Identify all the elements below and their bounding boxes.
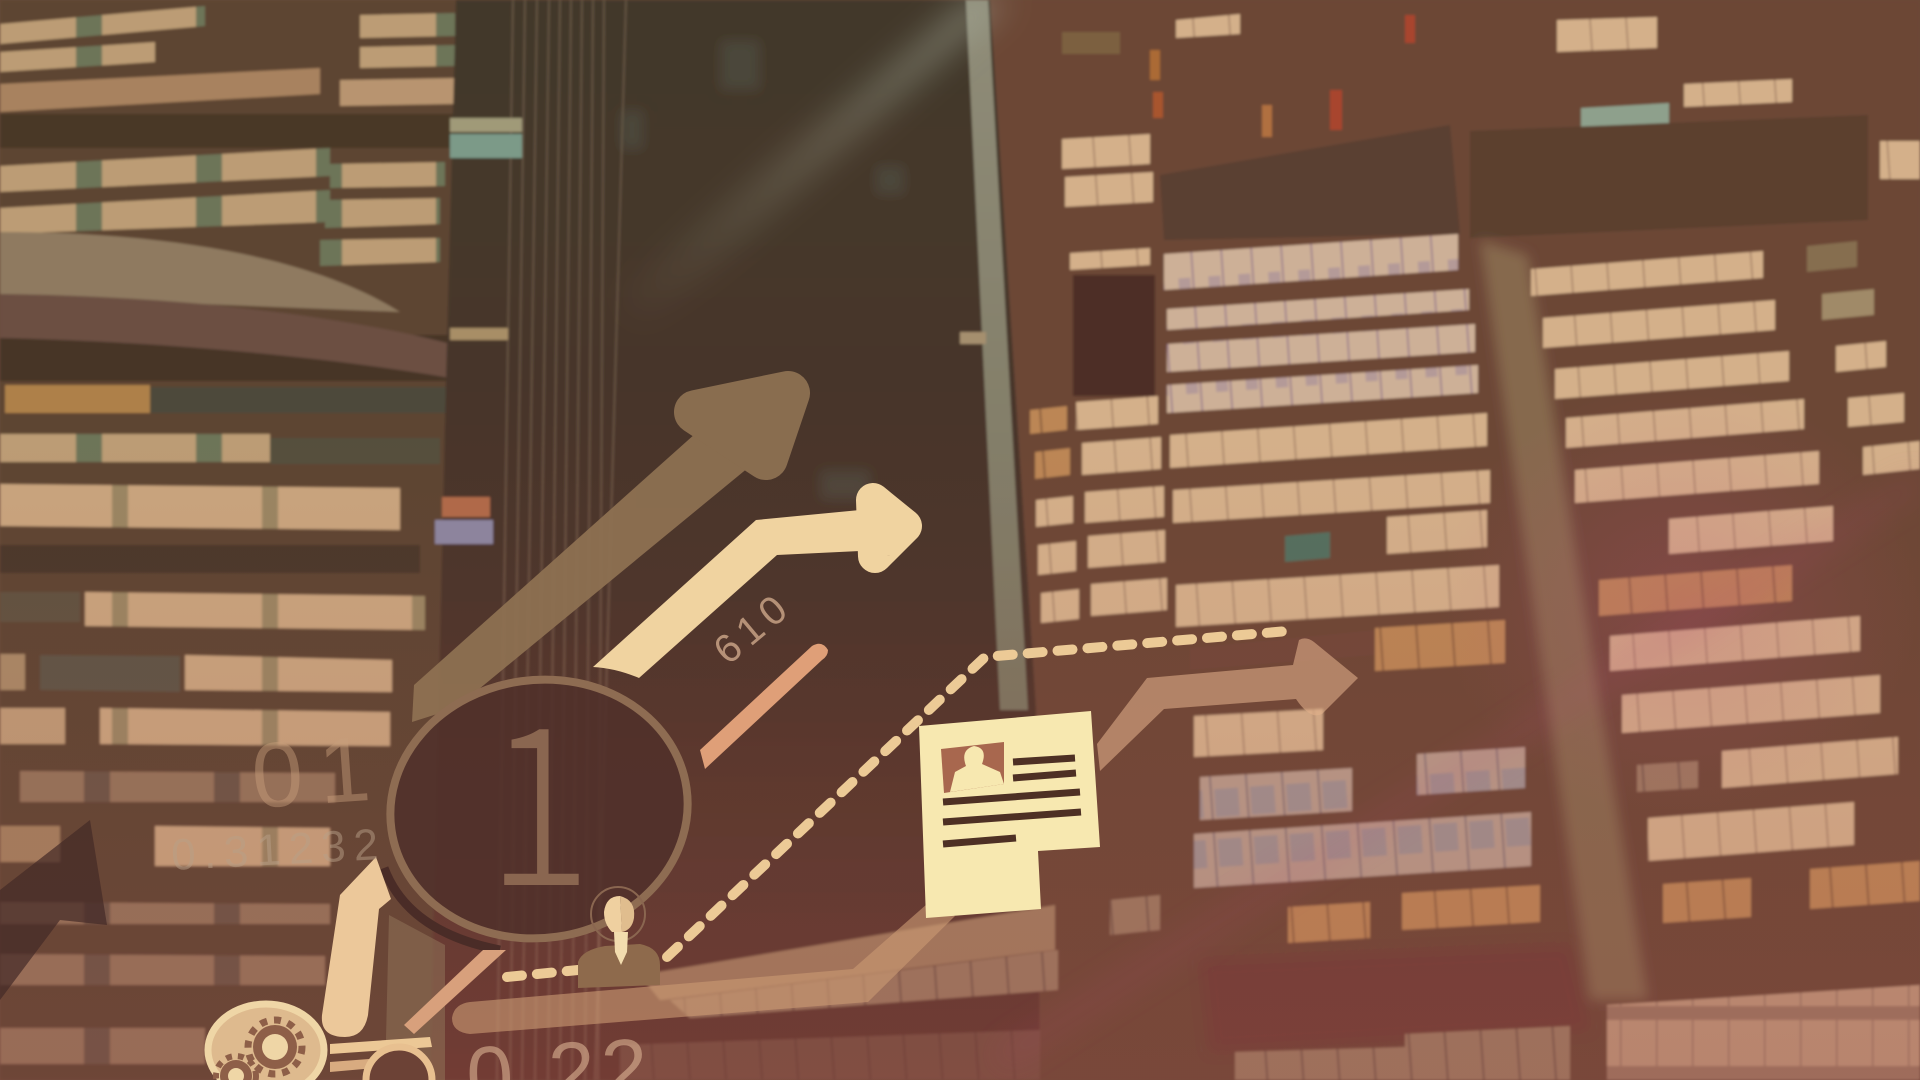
lower centre building band [620, 895, 1160, 1080]
icon: person [578, 887, 660, 988]
resume text lines [943, 758, 1081, 844]
graphic: translucent bent bar [452, 904, 955, 1034]
tower glass highlight strip [966, 0, 1028, 710]
graphic: bright left arrow shaft [322, 857, 391, 1037]
graphic: bottom translucent column [385, 915, 445, 1080]
lens flare streak [612, 0, 1920, 1060]
graphic: peach diagonal [404, 950, 506, 1034]
label: 610: 610 [706, 583, 801, 673]
faint teal speckles on the tower [620, 40, 905, 500]
label: 01: 01 [248, 717, 389, 828]
graphic: large muted arrow [412, 393, 788, 722]
dark roof block [1470, 115, 1868, 238]
dashed career path [507, 631, 1288, 977]
dark podium band [1200, 945, 1590, 1052]
graphic: dark arrow lower left [0, 820, 107, 1000]
icon: connector bars and ring [330, 1037, 432, 1080]
thin vertical tower lines [497, 0, 626, 1080]
icon: resume card [919, 711, 1100, 918]
label: 0.31232: 0.31232 [170, 820, 387, 880]
right building windows [1531, 241, 1920, 1080]
icon: gear badge [208, 1004, 324, 1080]
glass atrium strip [1480, 240, 1648, 1000]
small coloured window clusters [435, 118, 986, 544]
narrow left building windows [1030, 134, 1167, 623]
top windows [1062, 14, 1920, 179]
central dark tower [430, 0, 1040, 1080]
graphic: numbered circle [373, 631, 705, 957]
resume photo [941, 742, 1004, 793]
middle building windows [1164, 234, 1570, 1080]
numeral 1: 1 [486, 631, 592, 949]
graphic: peach bar [700, 644, 828, 769]
left curved tower [0, 0, 530, 1080]
right dark block [990, 0, 1920, 1080]
graphic: third muted arrow [1097, 638, 1358, 771]
graphic: bright arrow [593, 500, 905, 678]
